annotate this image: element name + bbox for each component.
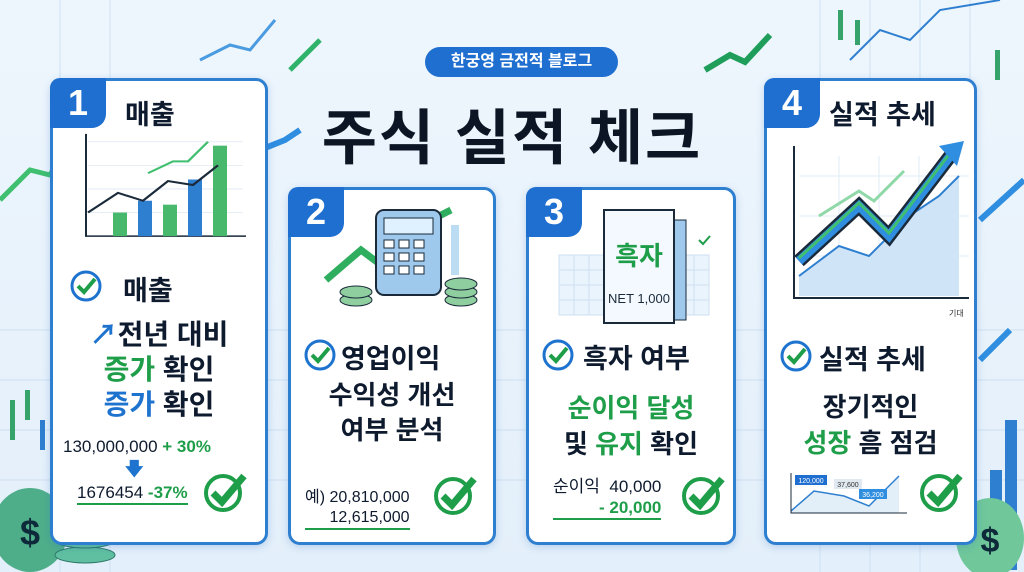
panel: 3 흑자 여부: 순이익 달성 [568,393,694,423]
panel: 2 영업이익 [288,187,496,545]
text: 전년 대비 증가 확인: 증가 확인 [104,389,214,420]
panel: 4 실적 추세: 성장 흠 점검 [803,428,938,458]
icon: report document [558,209,711,324]
panel: 1 매출: 1 [68,82,88,123]
panel: 4 실적 추세: 실적 추세 [829,100,936,130]
panel: 2 영업이익: 2 [306,191,326,232]
text: 전년 대비 증가 확인: 증가 확인 [104,354,214,385]
pill: blog name [425,47,618,77]
icon: report document: 흑자 [615,241,663,271]
icon: report document: NET 1,000 [608,291,670,306]
background decorations: $ [981,522,1000,560]
panel: 2 영업이익: 예) 20,810,000 [305,489,410,506]
bar chart [85,134,246,237]
panel: 3 흑자 여부 [526,187,736,545]
panel: 2 영업이익: 수익성 개선 [329,380,455,410]
mini chart: 120,000 [798,478,824,485]
title: 주식 실적 체크 [322,105,702,172]
panel: 4 실적 추세 [764,78,977,545]
panel: 1 매출: 1676454 -37% [77,483,188,502]
panel: 2 영업이익: 12,615,000 [330,509,410,526]
panel: 3 흑자 여부: 및 유지 확인 [564,429,698,459]
background decorations: $ [20,512,40,553]
panel: 2 영업이익: 영업이익 [341,344,440,374]
mini chart: 37,600 [837,482,859,489]
text: 전년 대비 증가 확인 [90,319,228,420]
panel: 3 흑자 여부: 흑자 여부 [583,344,690,374]
panel: 1 매출: 130,000,000 + 30% [63,437,211,456]
pill: blog name: 한궁영 금전적 블로그 [451,53,592,70]
line chart: trend: 기대 [949,308,964,319]
panel: 1 매출: 매출 [123,276,173,306]
panel: 3 흑자 여부: 3 [544,191,564,232]
panel: 1 매출: 🡇 [125,459,144,479]
line chart: trend [793,141,969,319]
mini chart [790,473,907,514]
panel: 1 매출: 매출 [125,100,175,130]
panel: 3 흑자 여부: - 20,000 [599,498,661,517]
panel: 4 실적 추세: 장기적인 [823,392,918,422]
mini chart: 36,200 [862,492,884,499]
check: 매출 [70,270,102,302]
panel: 1 매출 [50,78,268,545]
icon: calculator [324,206,478,306]
panel: 3 흑자 여부: 순이익 40,000 [553,477,661,496]
panel: 4 실적 추세: 실적 추세 [819,345,926,375]
panel: 2 영업이익: 여부 분석 [341,415,443,445]
panel: 4 실적 추세: 4 [782,82,802,123]
text: 전년 대비 증가 확인: ↗전년 대비 [90,319,228,350]
